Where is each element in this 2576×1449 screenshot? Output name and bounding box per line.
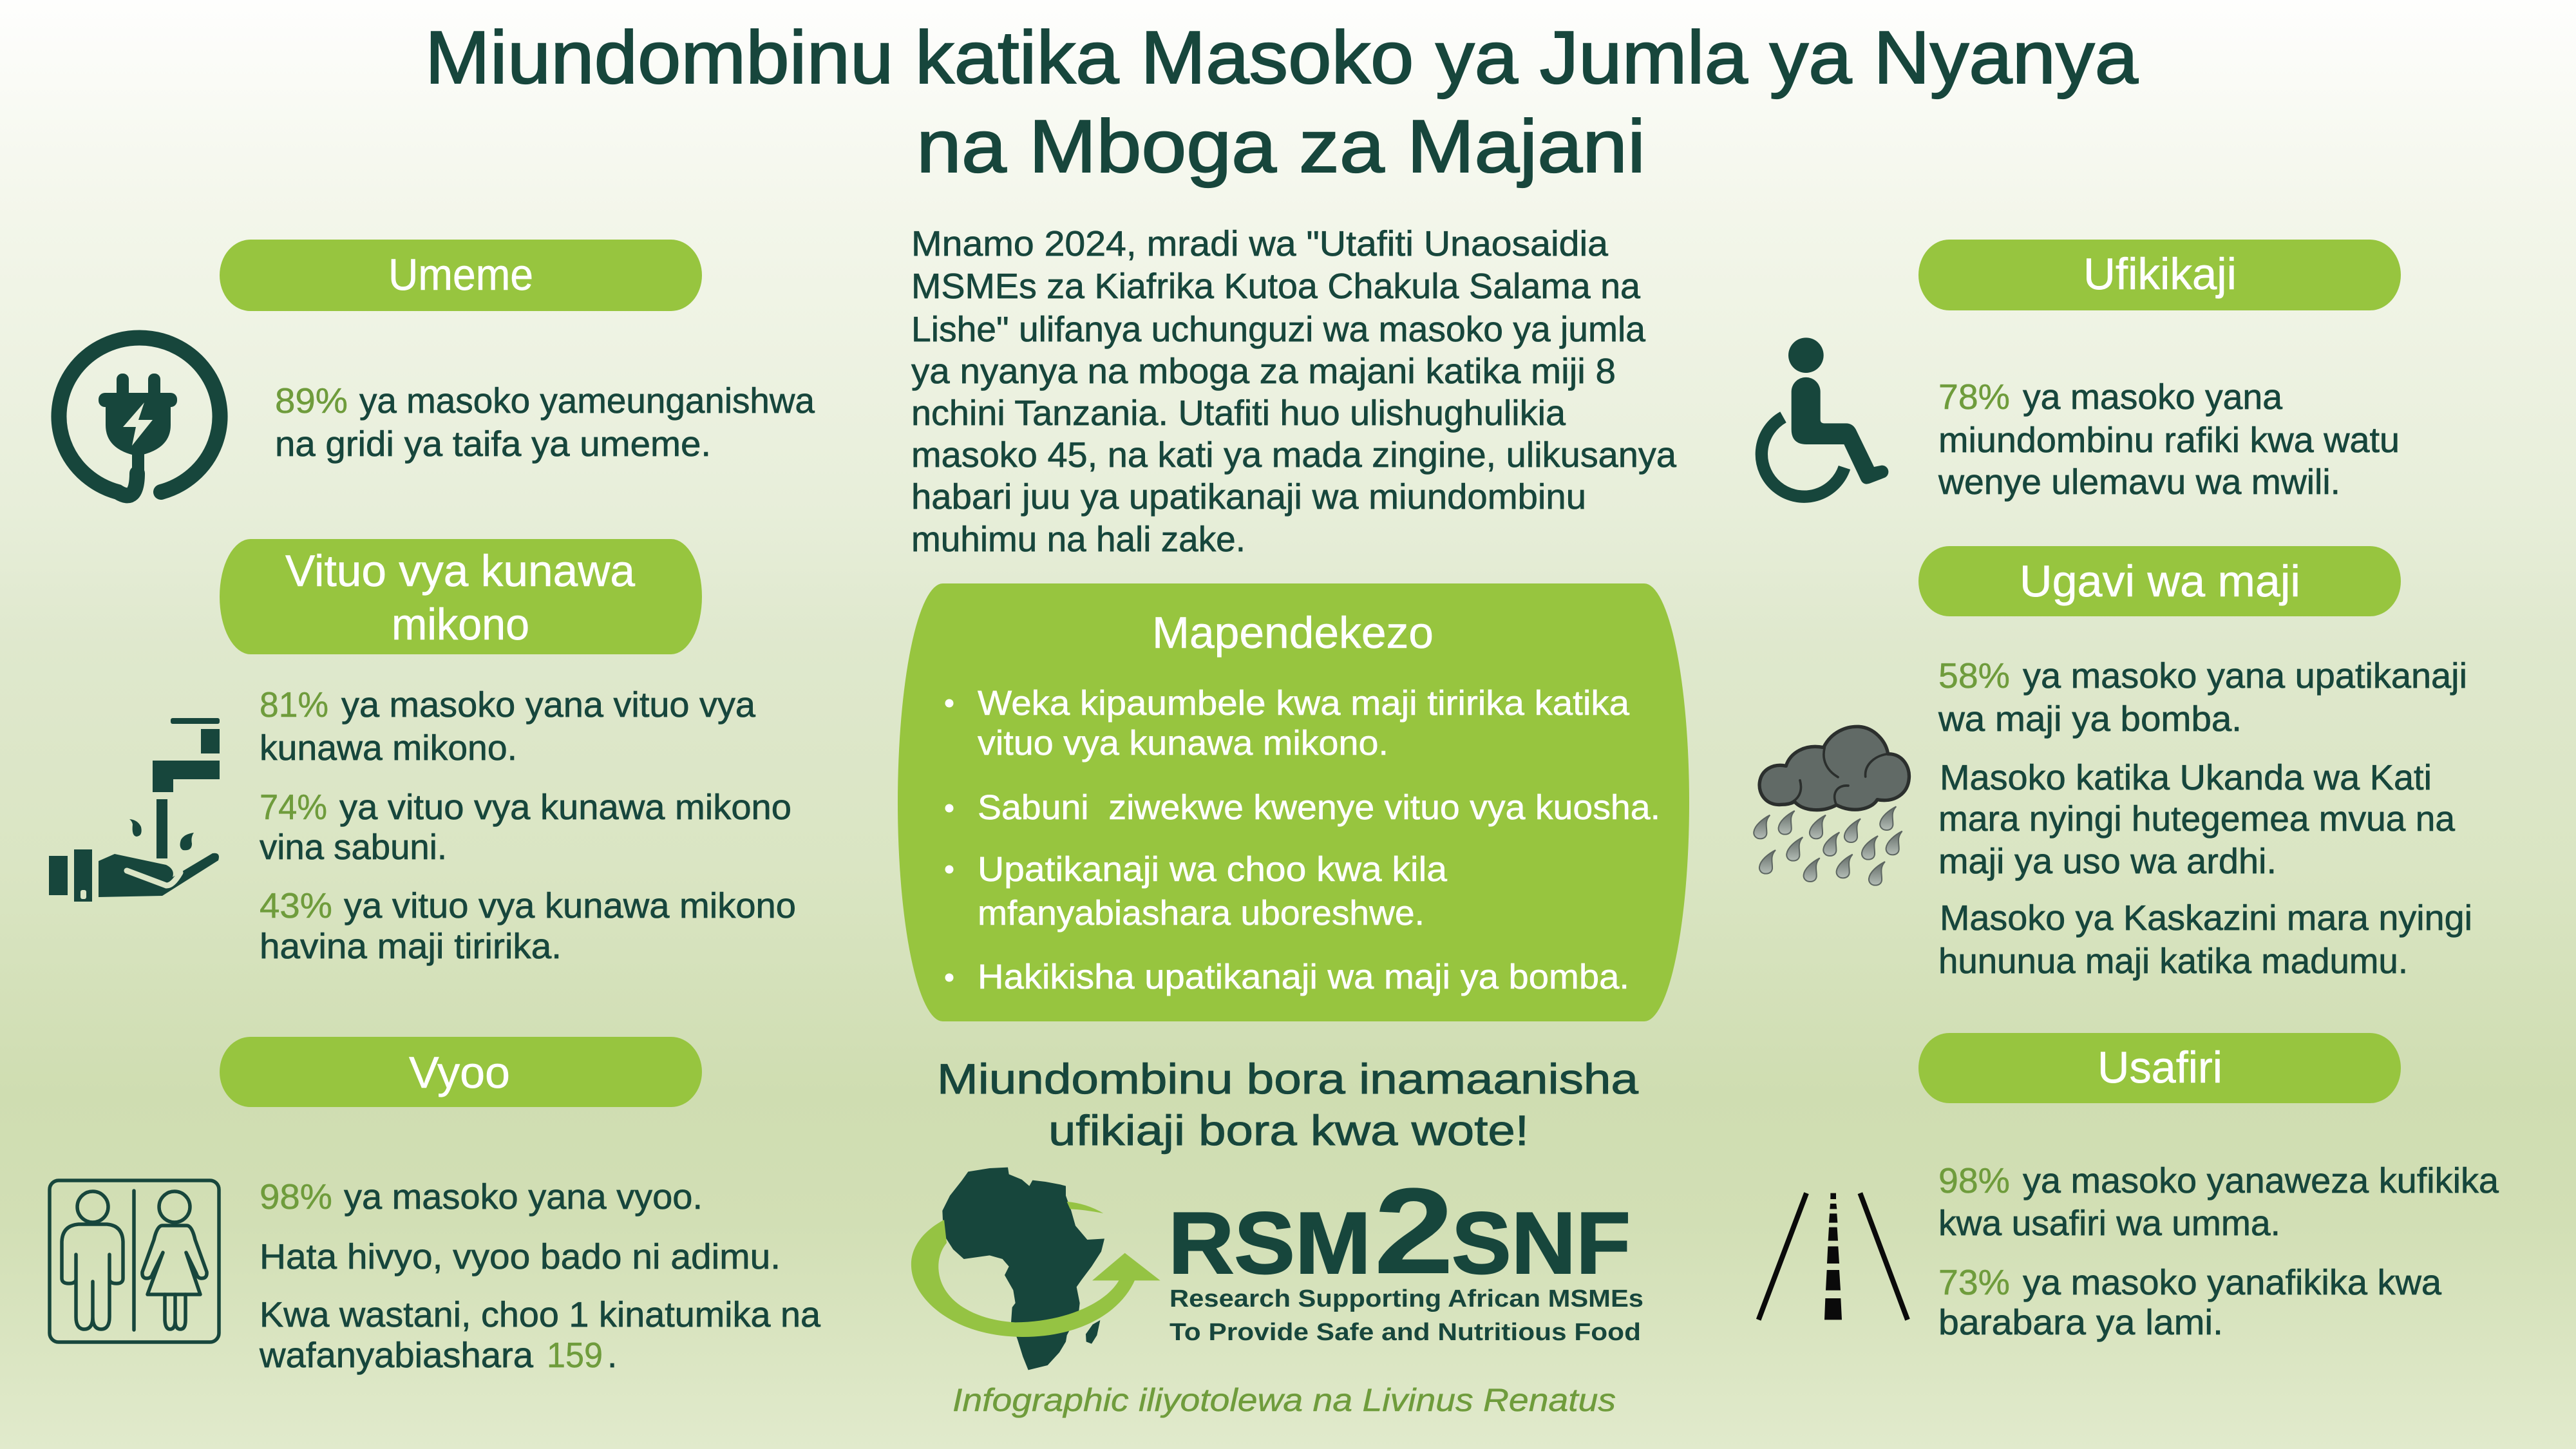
heading pill: Umeme: Umeme — [388, 250, 533, 299]
statistics: water supply: maji ya uso wa ardhi. — [1938, 841, 2277, 881]
intro paragraph: Mnamo 2024, mradi wa "Utafiti Unaosaidia — [911, 223, 1608, 263]
statistics: toilets: Kwa wastani, choo 1 kinatumika na — [260, 1294, 820, 1334]
statistic: grid electricity: ya masoko yameunganishwa — [359, 381, 815, 421]
heading pill: Umeme — [220, 240, 702, 311]
statistics: handwashing stations: ya vituo vya kunawa mikono — [339, 787, 791, 827]
statistics: transport: barabara ya lami. — [1938, 1302, 2223, 1342]
title: na Mboga za Majani — [916, 104, 1645, 188]
heading pill: Vituo vya kunawa mikono: mikono — [392, 600, 529, 649]
statistics: water supply: 58% — [1938, 656, 2010, 696]
statistics: handwashing stations: ya vituo vya kunawa mikono — [344, 886, 796, 925]
heading: Mapendekezo: Mapendekezo — [1152, 608, 1434, 658]
logo wordmark: Research Supporting African MSMEs — [1170, 1285, 1643, 1312]
recommendation bullets: Weka kipaumbele kwa maji tiririka katika — [978, 684, 1630, 723]
heading pill: Ufikikaji: Ufikikaji — [2083, 249, 2237, 299]
recommendation bullets: Upatikanaji wa choo kwa kila — [978, 850, 1448, 889]
intro paragraph: masoko 45, na kati ya mada zingine, ulikusanya — [911, 435, 1676, 475]
statistics: handwashing stations: 43% — [260, 886, 332, 925]
logo wordmark: To Provide Safe and Nutritious Food — [1170, 1319, 1641, 1346]
statistics: toilets: 98% — [260, 1177, 332, 1217]
statistics: water supply: hununua maji katika madumu. — [1938, 941, 2408, 981]
statistic: grid electricity: na gridi ya taifa ya umeme. — [275, 424, 711, 464]
statistic: accessibility: wenye ulemavu wa mwili. — [1938, 462, 2340, 502]
intro paragraph: habari juu ya upatikanaji wa miundombinu — [911, 477, 1586, 516]
icon: road — [1759, 1193, 1908, 1320]
panel: Ufikikaji — [1761, 240, 2401, 502]
statistics: water supply: wa maji ya bomba. — [1938, 699, 2242, 739]
heading pill: Vyoo: Vyoo — [409, 1048, 510, 1097]
intro paragraph — [911, 223, 1676, 559]
panel: Ugavi wa maji — [1754, 546, 2472, 981]
statistics: toilets: wafanyabiashara — [259, 1335, 533, 1375]
intro paragraph: muhimu na hali zake. — [911, 519, 1245, 559]
icon: handwashing tap and hand — [49, 718, 220, 902]
title: Miundombinu katika Masoko ya Jumla ya Nyanya — [425, 15, 2139, 99]
heading pill: Vituo vya kunawa mikono: Vituo vya kunawa — [285, 546, 636, 596]
statistics: transport: kwa usafiri wa umma. — [1938, 1203, 2280, 1243]
panel: Vyoo — [50, 1037, 820, 1375]
statistics: transport — [1938, 1160, 2499, 1342]
statistics: water supply — [1938, 656, 2472, 981]
logo wordmark: 2 — [1374, 1163, 1454, 1300]
recommendation bullets: vituo vya kunawa mikono. — [978, 724, 1388, 762]
heading pill: Ufikikaji — [1918, 240, 2401, 310]
statistic: accessibility: ya masoko yana — [2023, 377, 2282, 417]
slogan: ufikiaji bora kwa wote! — [1048, 1106, 1529, 1154]
slogan — [937, 1055, 1638, 1154]
statistics: transport: 98% — [1938, 1160, 2010, 1200]
icon: toilet sign — [50, 1180, 219, 1342]
statistics: handwashing stations: ya masoko yana vituo vya — [341, 685, 755, 724]
statistics: toilets — [259, 1177, 820, 1375]
intro paragraph: Lishe" ulifanya uchunguzi wa masoko ya jumla — [911, 309, 1645, 349]
statistics: toilets: ya masoko yana vyoo. — [344, 1177, 703, 1217]
icon: electric plug — [59, 337, 220, 495]
heading pill: Vyoo — [220, 1037, 702, 1107]
intro paragraph: ya nyanya na mboga za majani katika miji 8 — [911, 351, 1616, 391]
statistics: toilets: 159 — [547, 1335, 603, 1375]
panel: Usafiri — [1759, 1033, 2499, 1342]
panel: Vituo vya kunawa mikono — [49, 539, 796, 966]
credit line: Infographic iliyotolewa na Livinus Renatus — [952, 1382, 1616, 1418]
slogan: Miundombinu bora inamaanisha — [937, 1055, 1638, 1103]
statistics: handwashing stations: vina sabuni. — [260, 827, 447, 867]
statistic: accessibility — [1938, 377, 2400, 502]
heading pill: Usafiri — [1918, 1033, 2401, 1103]
panel: Mapendekezo recommendations — [898, 583, 1689, 1021]
icon: rain cloud — [1754, 726, 1909, 886]
title — [425, 15, 2139, 188]
statistics: handwashing stations — [260, 685, 796, 966]
logo wordmark — [1168, 1163, 1643, 1346]
statistic: accessibility: miundombinu rafiki kwa watu — [1938, 420, 2400, 460]
statistics: handwashing stations: havina maji tiririka. — [260, 926, 562, 966]
icon: wheelchair — [1761, 337, 1888, 497]
logo wordmark: RSM — [1168, 1194, 1371, 1292]
statistics: toilets: Hata hivyo, vyoo bado ni adimu. — [260, 1236, 781, 1276]
heading pill: Vituo vya kunawa mikono — [220, 539, 702, 654]
logo: RSM2SNF — [911, 1163, 1643, 1370]
logo wordmark: SNF — [1452, 1194, 1631, 1292]
statistics: toilets: . — [607, 1335, 617, 1375]
statistics: water supply: Masoko ya Kaskazini mara nyingi — [1940, 898, 2472, 938]
statistics: handwashing stations: kunawa mikono. — [260, 728, 517, 768]
statistic: grid electricity: 89% — [275, 381, 348, 421]
statistic: grid electricity — [275, 381, 815, 464]
statistics: handwashing stations: 74% — [260, 787, 327, 827]
heading pill: Ugavi wa maji: Ugavi wa maji — [2020, 556, 2300, 606]
statistics: transport: ya masoko yanafikika kwa — [2023, 1262, 2441, 1302]
panel: Umeme — [59, 240, 815, 495]
recommendation bullets: mfanyabiashara uboreshwe. — [978, 894, 1425, 933]
intro paragraph: nchini Tanzania. Utafiti huo ulishughulikia — [911, 393, 1566, 433]
statistics: transport: ya masoko yanaweza kufikika — [2023, 1160, 2499, 1200]
statistics: water supply: mara nyingi hutegemea mvua na — [1938, 799, 2455, 838]
statistics: handwashing stations: 81% — [260, 685, 328, 724]
statistics: transport: 73% — [1938, 1262, 2010, 1302]
statistics: water supply: ya masoko yana upatikanaji — [2023, 656, 2467, 696]
recommendation bullets: Hakikisha upatikanaji wa maji ya bomba. — [978, 958, 1629, 996]
recommendation bullets — [945, 684, 1660, 996]
statistic: accessibility: 78% — [1938, 377, 2010, 417]
heading pill: Usafiri: Usafiri — [2098, 1043, 2222, 1092]
intro paragraph: MSMEs za Kiafrika Kutoa Chakula Salama na — [911, 266, 1640, 306]
recommendation bullets: Sabuni ziwekwe kwenye vituo vya kuosha. — [978, 788, 1660, 827]
logo icon: Africa with green arrow — [911, 1168, 1160, 1370]
statistics: water supply: Masoko katika Ukanda wa Kati — [1940, 757, 2432, 797]
heading pill: Ugavi wa maji — [1918, 546, 2401, 616]
